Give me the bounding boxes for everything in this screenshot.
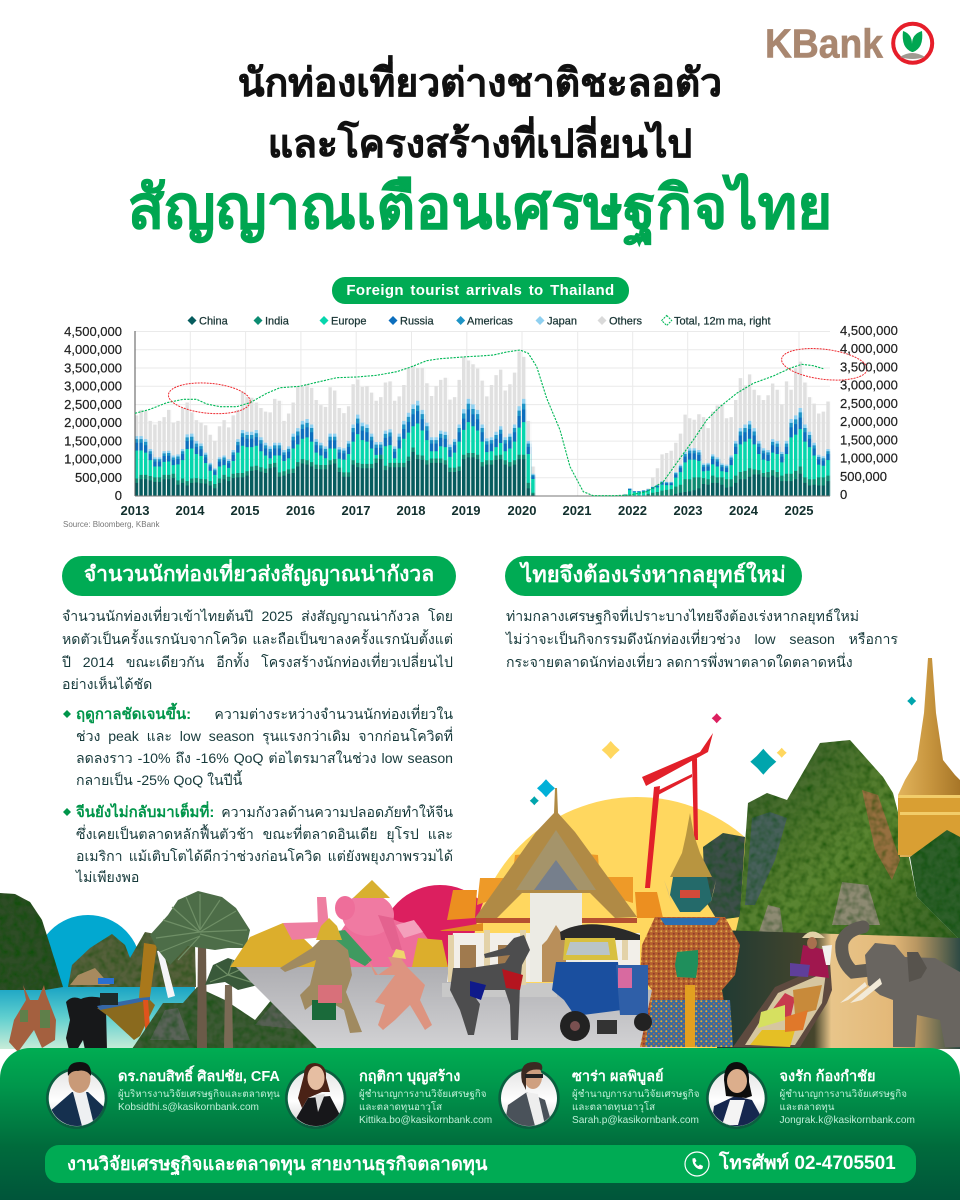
year labels: 2018 (397, 503, 425, 518)
bullet: China (63, 801, 453, 885)
icon: shadow puppets (9, 985, 107, 1052)
right axis labels: 2,500,000 (840, 396, 898, 411)
stacked bars (135, 351, 831, 496)
left axis labels (64, 324, 122, 503)
icon: khon dancers (280, 918, 432, 1033)
left axis labels: 4,000,000 (64, 342, 122, 357)
icon: palm trees (150, 891, 258, 1049)
portrait: Jongrak (706, 1062, 767, 1129)
callout: 2014 dip ellipse (167, 380, 251, 417)
left axis labels: 3,000,000 (64, 378, 122, 394)
icon: pink Ganesha statue (230, 880, 448, 967)
diamond: yellow small (777, 748, 787, 758)
contact: Kobsidthi (118, 1065, 280, 1113)
bars: India (135, 447, 831, 496)
legend: Europe (331, 316, 366, 328)
diamond: teal (530, 796, 539, 805)
right axis labels: 3,500,000 (840, 360, 898, 374)
diamond: teal small (907, 696, 916, 706)
heading: new strategy (505, 556, 802, 596)
contact: Kobsidthi: ผู้บริหารงานวิจัยเศรษฐกิจและตลาดทุน (118, 1089, 280, 1100)
year labels: 2021 (563, 503, 591, 518)
contact: Kittika: Kittika.bo@kasikornbank.com (359, 1115, 492, 1126)
diamond: crimson (712, 713, 722, 723)
icon: red giant swing (642, 733, 713, 888)
contact: Jongrak: ผู้ชำนาญการงานวิจัยเศรษฐกิจ (780, 1089, 907, 1100)
bars: China (135, 452, 831, 496)
left axis labels: 1,000,000 (64, 452, 122, 466)
chart title pill (332, 277, 629, 304)
callout: 2025 dip ellipse (780, 344, 869, 384)
text block: strategy: ไม่ว่าจะเป็นกิจกรรมดึงนักท่องเที่ยวช่วง low season หรือการ (506, 631, 898, 647)
right axis labels: 4,000,000 (840, 341, 898, 356)
contact: Jongrak (780, 1068, 915, 1126)
bullet: seasonality: ฤดูกาลชัดเจนขึ้น: ความต่างระหว่างจำนวนนักท่องเที่ยวใน (76, 706, 453, 723)
portrait: Sarah (498, 1062, 560, 1129)
bars: Japan (135, 399, 831, 496)
legend: Total, 12m ma, right (674, 316, 771, 328)
year labels: 2022 (618, 503, 647, 518)
contact: Jongrak: Jongrak.k@kasikornbank.com (780, 1115, 915, 1126)
right axis labels: 4,500,000 (840, 323, 898, 338)
heading: worrying signal (62, 556, 456, 596)
bullet: China: อเมริกา แม้เติบโตได้ดีกว่าช่วงก่อนโควิด แต่ยังพยุงภาพรวมได้ (76, 848, 453, 864)
right axis labels: 1,500,000 (840, 432, 898, 448)
icon: elephant (840, 927, 960, 1047)
legend: China (199, 316, 229, 328)
contact: Kobsidthi: ดร.กอบสิทธิ์ ศิลปชัย, CFA (118, 1069, 280, 1085)
title line 3: สัญญาณเตือนเศรษฐกิจไทย (128, 174, 832, 241)
year labels: 2019 (452, 503, 480, 518)
left axis labels: 0 (115, 488, 122, 503)
contact: Kittika: และตลาดทุนอาวุโส (359, 1102, 442, 1113)
phone number: โทรศัพท์ 02-4705501 (719, 1153, 896, 1174)
legend: India (265, 316, 290, 328)
title line 2: และโครงสร้างที่เปลี่ยนไป (268, 123, 692, 166)
chart title pill: Foreign tourist arrivals to Thailand (346, 282, 615, 299)
icon: Muay Thai boxers (450, 935, 530, 1040)
icon: golden pagoda (898, 658, 960, 940)
year labels: 2023 (674, 503, 702, 518)
year labels: 2024 (729, 503, 759, 518)
right axis labels: 1,000,000 (840, 450, 898, 466)
left axis labels: 2,000,000 (64, 415, 122, 430)
logo: KBank: KBank (765, 20, 883, 66)
footer portraits (46, 1062, 768, 1129)
text block: intro (62, 606, 453, 692)
heading: worrying signal: จำนวนนักท่องเที่ยวส่งสัญญาณน่ากังวล (84, 563, 434, 586)
right axis labels: 3,000,000 (840, 378, 898, 392)
legend: Russia (400, 316, 435, 328)
bullet: seasonality: กลายเป็น -25% QoQ ในปีนี้ (76, 772, 242, 788)
year labels (121, 503, 813, 518)
bullet: seasonality: ช่วง peak และ low season รุนแรงกว่าเดิม จากก่อนโควิดที่ (76, 728, 453, 744)
bullet: China: ไม่เพียงพอ (76, 869, 139, 885)
bars: Russia (135, 410, 831, 496)
contact: Sarah: ซาร่า ผลพิบูลย์ (572, 1069, 663, 1085)
right axis labels: 2,000,000 (840, 414, 898, 429)
left axis labels: 3,500,000 (64, 360, 122, 376)
bars: Others (135, 351, 831, 496)
year labels: 2017 (342, 503, 370, 518)
bullet: China: จีนยังไม่กลับมาเต็มที่: ความกังวลด้านความปลอดภัยทำให้จีน (76, 804, 453, 821)
heading: new strategy: ไทยจึงต้องเร่งหากลยุทธ์ใหม่ (521, 562, 786, 587)
year labels: 2016 (286, 503, 315, 518)
text block: strategy: กระจายตลาดนักท่องเที่ยว ลดการพึ่งพาตลาดใดตลาดหนึ่ง (506, 654, 853, 670)
scene: stone pavement (236, 967, 665, 1049)
portrait: Kittika (285, 1063, 346, 1130)
bars: Americas (135, 404, 831, 496)
year labels: 2025 (785, 503, 813, 518)
decorative circle: yellow sun (472, 797, 802, 1127)
decorative circle: blue (35, 915, 141, 1021)
footer contact bar (45, 1145, 916, 1183)
contact: Kittika: ผู้ชำนาญการงานวิจัยเศรษฐกิจ (359, 1089, 486, 1100)
legend: Americas (467, 316, 513, 328)
contact: Sarah: Sarah.p@kasikornbank.com (572, 1115, 699, 1126)
contact: Kittika (359, 1068, 492, 1126)
decorative circle: crimson (380, 885, 500, 1005)
title line 1: นักท่องเที่ยวต่างชาติชะลอตัว (238, 62, 722, 105)
year labels: 2013 (121, 503, 149, 518)
left axis labels: 1,500,000 (64, 434, 122, 448)
axes (134, 331, 136, 496)
left axis labels: 4,500,000 (64, 324, 122, 339)
contact: Sarah: และตลาดทุนอาวุโส (572, 1102, 655, 1113)
icon: Thai temple (440, 788, 663, 997)
right axis labels: 500,000 (840, 469, 887, 484)
right axis labels (840, 323, 898, 502)
legend (188, 316, 771, 328)
bullet: China: ซึ่งเคยเป็นตลาดหลักฟื้นตัวช้า ขณะที่ตลาดอินเดีย ยุโรป และ (76, 826, 453, 842)
icon: longtail boat (97, 943, 175, 1040)
bullet: seasonality (63, 702, 453, 788)
chart: foreign tourist arrivals (63, 314, 898, 529)
title (128, 55, 832, 248)
text block: strategy (505, 606, 898, 670)
contact: Sarah (572, 1068, 699, 1126)
line: Total 12m ma (135, 350, 823, 496)
department name: งานวิจัยเศรษฐกิจและตลาดทุน สายงานธุรกิจตลาดทุน (67, 1153, 487, 1174)
contact: Kobsidthi: Kobsidthi.s@kasikornbank.com (118, 1102, 259, 1113)
scene: sea and limestone islands (0, 893, 196, 1049)
icon: tuk-tuk (552, 924, 652, 1041)
text block: strategy: ท่ามกลางเศรษฐกิจที่เปราะบางไทยจึงต้องเร่งหากลยุทธ์ใหม่ (506, 608, 859, 624)
scene: river (717, 930, 960, 1049)
bars: Europe (135, 422, 831, 496)
scene: limestone cliffs (703, 740, 960, 960)
bullet: seasonality: ลดลงราว -10% ถึง -16% QoQ ต่อไตรมาสในช่วง low season (76, 750, 453, 766)
year labels: 2014 (176, 503, 205, 518)
portrait: Kobsidthi (46, 1062, 107, 1129)
icon: Yak temple guardian (640, 813, 740, 1047)
footer panel (0, 1048, 960, 1200)
contact: Jongrak: จงรัก ก้องกำชัย (780, 1069, 876, 1085)
text block: intro: อย่างเห็นได้ชัด (62, 676, 152, 692)
legend: Japan (547, 316, 577, 328)
year labels: 2020 (508, 503, 536, 518)
left axis labels: 2,500,000 (64, 397, 122, 412)
contact: Sarah: ผู้ชำนาญการงานวิจัยเศรษฐกิจ (572, 1089, 699, 1100)
icon: bullet diamond (63, 710, 71, 718)
diamond: teal large (750, 749, 776, 775)
year labels: 2015 (231, 503, 259, 518)
text block: intro: หดตัวเป็นครั้งแรกนับจากโควิด และถือเป็นขาลงครั้งแรกนับตั้งแต่ (62, 631, 453, 647)
icon: bullet diamond (63, 808, 71, 816)
left axis labels: 500,000 (75, 470, 122, 485)
right axis labels: 0 (840, 487, 847, 502)
diamond: yellow (602, 741, 620, 759)
text block: intro: จำนวนนักท่องเที่ยวเข้าไทยต้นปี 2025 ส่งสัญญาณน่ากังวล โดย (62, 608, 453, 624)
source note: Source: Bloomberg, KBank (63, 520, 160, 529)
contact: Jongrak: และตลาดทุน (780, 1102, 834, 1113)
diamond: cyan (537, 779, 555, 797)
contact: Kittika: กฤติกา บุญสร้าง (359, 1069, 460, 1085)
scene: rocks and bushes (132, 983, 317, 1049)
legend: Others (609, 316, 643, 328)
text block: intro: ปี 2014 ขณะเดียวกัน อีกทั้ง โครงสร้างนักท่องเที่ยวเปลี่ยนไป (62, 654, 453, 670)
icon: phone (684, 1151, 710, 1177)
icon: floating market boat (733, 932, 832, 1047)
